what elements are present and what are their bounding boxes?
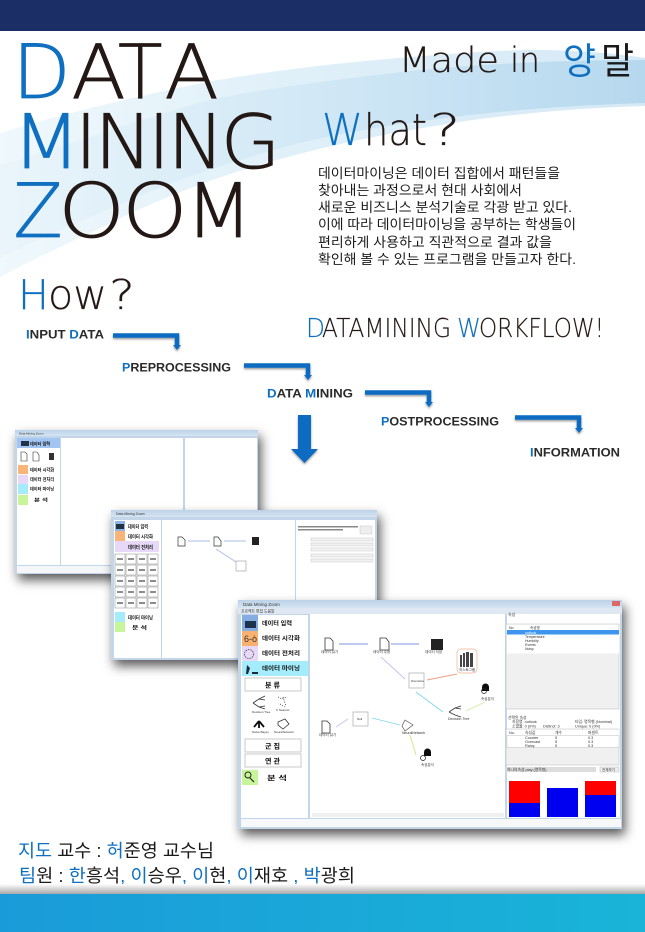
- attribute list panel: 속성: [508, 611, 516, 617]
- attribute statistics: 5: [555, 736, 557, 740]
- title: DATA MINING ZOOM: Z: [13, 167, 63, 255]
- screenshot window 3: [238, 600, 622, 829]
- heading: How?: ow: [48, 271, 107, 319]
- attribute list panel: Events: [525, 643, 536, 647]
- sidebar menu items: 데이터 입력: [30, 440, 50, 448]
- heading: Made in 양말: [399, 41, 634, 82]
- sidebar menu: 6-ò: [244, 634, 257, 644]
- attribute statistics: [506, 715, 619, 765]
- description paragraph: [318, 166, 576, 267]
- description paragraph: 찾아내는 과정으로서 현대 사회에서: [318, 183, 522, 198]
- attribute statistics: 타입: 명목형 (Nominal): [575, 719, 613, 724]
- description paragraph: 새로운 비즈니스 분석기술로 각광 받고 있다.: [318, 200, 572, 215]
- preprocessing button grid: [115, 554, 158, 608]
- heading: Made in 양말: 말: [601, 41, 634, 82]
- attribute statistics: 0.3: [588, 740, 593, 744]
- sidebar menu: 연 관: [265, 756, 281, 766]
- workflow diagram on canvas: 속성분석: [481, 696, 494, 701]
- workflow diagram on canvas: NeuralNetwork: [402, 731, 425, 735]
- title: DATA MINING ZOOM: N: [168, 98, 224, 186]
- attribute list panel: Noisy: [525, 647, 534, 651]
- screenshot window 1: Data Mining Zoom: [19, 432, 44, 436]
- settings panel: [298, 526, 373, 562]
- title: DATA MINING ZOOM: D: [13, 28, 70, 116]
- workflow diagram on canvas: Decision Tree: [448, 717, 469, 721]
- sidebar menu: 데이터 입력: [262, 620, 292, 628]
- title: DATA MINING ZOOM: G: [221, 98, 281, 186]
- attribute statistics: Distinct: 3: [543, 724, 560, 728]
- title: DATA MINING ZOOM: [12, 28, 281, 255]
- workflow step: PREPROCESSING: PREPROCESSING: [122, 360, 231, 374]
- attribute statistics: 개수: [555, 730, 562, 735]
- class dropdown: [506, 767, 619, 772]
- attribute list panel: outlook: [525, 631, 537, 635]
- heading: Made in 양말: 양: [563, 41, 596, 82]
- heading: DATAMINING WORKFLOW!: ORKFLOW!: [479, 314, 604, 344]
- sidebar menu items: 데이터 마이닝: [128, 614, 153, 622]
- workflow diagram on canvas: 속성분석: [421, 762, 434, 767]
- attribute statistics: Unique: 0 (0%): [575, 724, 601, 728]
- attribute statistics: Counter: [525, 736, 539, 740]
- heading: DATAMINING WORKFLOW!: ATAMINING: [322, 314, 451, 344]
- sidebar menu items: 데이터 전처리: [128, 544, 153, 551]
- screenshot window 3: Data Mining Zoom: [243, 602, 280, 607]
- sidebar menu: 데이터 시각화: [262, 634, 301, 642]
- screenshot window 2: Data Mining Zoom: [116, 512, 145, 516]
- attribute list panel: [506, 611, 619, 709]
- bar chart: [507, 773, 620, 818]
- arrow: input to preprocessing: [113, 336, 181, 350]
- sidebar menu: [242, 615, 308, 785]
- title: DATA MINING ZOOM: O: [122, 167, 187, 255]
- sidebar menu: 군 집: [265, 742, 280, 750]
- title: DATA MINING ZOOM: N: [94, 98, 153, 186]
- workflow diagram on canvas: 데이터 읽기: [321, 649, 338, 654]
- attribute statistics: 퍼센트: [588, 730, 599, 735]
- attribute statistics: 5: [555, 744, 557, 748]
- description paragraph: 확인해 볼 수 있는 프로그램을 만들고자 한다.: [318, 252, 576, 267]
- big down arrow: [291, 415, 318, 463]
- screenshot window 2: [111, 510, 377, 660]
- workflow diagram on canvas: Discretize: [411, 679, 425, 683]
- workflow diagram on canvas: [319, 638, 494, 767]
- heading: What?: hat: [364, 105, 427, 156]
- attribute statistics: 속성명: outlook: [512, 719, 537, 724]
- classification icons: Decision Tree: [252, 710, 271, 714]
- title: DATA MINING ZOOM: A: [71, 28, 126, 116]
- arrow: preprocessing to data mining: [244, 366, 312, 380]
- classification icons: [252, 696, 294, 734]
- attribute list panel: Humidity: [525, 639, 539, 643]
- workflow diagram on canvas: 데이터 저장: [425, 649, 443, 654]
- sidebar menu: 데이터 전처리: [262, 650, 300, 658]
- heading: How?: [18, 271, 135, 319]
- team credit: 팀원 : 한흥석, 이승우, 이현, 이재호 , 박광희: [19, 866, 355, 886]
- heading: DATAMINING WORKFLOW!: D: [306, 314, 325, 344]
- title: DATA MINING ZOOM: I: [75, 98, 97, 186]
- sidebar menu: 데이터 마이닝: [262, 664, 300, 672]
- attribute statistics: 5: [555, 740, 557, 744]
- top navy bar: [0, 0, 645, 31]
- heading: Made in 양말: Made: [399, 41, 499, 81]
- description paragraph: 편리하게 사용하고 직관적으로 결과 값을: [318, 235, 552, 250]
- workflow diagram on canvas: Null: [357, 717, 363, 721]
- workflow step: POSTPROCESSING: POSTPROCESSING: [381, 414, 499, 428]
- sidebar menu: 분 석: [267, 773, 287, 782]
- sidebar menu items: 데이터 시각화: [30, 466, 55, 474]
- attribute statistics: 속성값: [525, 730, 536, 735]
- sidebar menu items: 데이터 전처리: [30, 476, 54, 483]
- screenshot window 1: [15, 430, 258, 574]
- sidebar menu items: 데이터 마이닝: [30, 486, 54, 492]
- heading: How?: H: [18, 271, 49, 319]
- workflow step: INPUT DATA: INPUT DATA: [26, 328, 104, 342]
- workflow step: DATA MINING: DATA MINING: [267, 386, 353, 400]
- class dropdown: 하나의속성 play (명목형): [507, 767, 547, 772]
- workflow canvas diagram: [178, 537, 259, 571]
- sidebar menu items: 데이터 입력: [128, 524, 148, 530]
- workflow diagram on canvas: 데이터 수정: [373, 649, 390, 654]
- attribute list panel: Temperature: [525, 635, 545, 639]
- arrow: data mining to postprocessing: [365, 392, 433, 407]
- title: DATA MINING ZOOM: M: [12, 98, 81, 186]
- heading: DATAMINING WORKFLOW!: W: [457, 314, 481, 344]
- heading: How?: ?: [109, 271, 135, 319]
- attribute list panel: 속성명: [530, 625, 540, 630]
- heading: What?: ?: [430, 105, 460, 156]
- title: DATA MINING ZOOM: T: [118, 28, 162, 116]
- sidebar menu items: [115, 521, 159, 632]
- screenshot window 3: 프로젝트 편집 도움말: [241, 608, 275, 614]
- attribute statistics: No.: [509, 731, 515, 735]
- description paragraph: 이에 따라 데이터마이닝을 공부하는 학생들이: [318, 217, 576, 232]
- heading: Made in 양말: in: [510, 41, 540, 81]
- bottom blue bar: [0, 894, 645, 932]
- heading: What?: W: [322, 105, 363, 156]
- title: DATA MINING ZOOM: O: [58, 167, 125, 255]
- sidebar menu items: [17, 438, 60, 505]
- attribute statistics: 선택된 속성: [508, 715, 527, 720]
- class dropdown: 전체보기: [602, 767, 615, 772]
- title: DATA MINING ZOOM: I: [148, 98, 170, 186]
- arrow: postprocessing to information: [515, 418, 583, 433]
- attribute statistics: 0.3: [588, 736, 593, 740]
- title: DATA MINING ZOOM: A: [164, 28, 219, 116]
- classification icons: NeuralNetwork: [274, 730, 294, 734]
- classification icons: K Nearest: [276, 708, 290, 712]
- sidebar menu items: 데이터 시각화: [128, 534, 153, 540]
- sidebar menu items: 분 석: [34, 496, 48, 504]
- bottom shadow strip: [0, 884, 645, 894]
- attribute statistics: 0.3: [588, 744, 593, 748]
- attribute statistics: Overcast: [525, 740, 541, 744]
- title: DATA MINING ZOOM: M: [185, 167, 253, 255]
- attribute statistics: 소멸율: 0 (0%): [512, 724, 537, 728]
- workflow step: INFORMATION: INFORMATION: [530, 446, 620, 460]
- description paragraph: 데이터마이닝은 데이터 집합에서 패턴들을: [318, 166, 560, 181]
- workflow diagram on canvas: 히스토그램: [459, 667, 475, 672]
- attribute statistics: Rainy: [525, 744, 535, 748]
- sidebar menu: 분 류: [265, 682, 281, 690]
- attribute list panel: No.: [509, 626, 514, 630]
- heading: DATAMINING WORKFLOW!: [306, 314, 604, 344]
- workflow diagram on canvas: 데이터 읽기: [319, 732, 336, 737]
- background swoosh: [0, 50, 645, 277]
- heading: What?: [322, 105, 460, 156]
- advisor credit: 지도 교수 : 허준영 교수님: [18, 841, 214, 861]
- classification icons: Naive Bayes: [252, 730, 269, 734]
- sidebar menu items: 분 석: [132, 624, 148, 632]
